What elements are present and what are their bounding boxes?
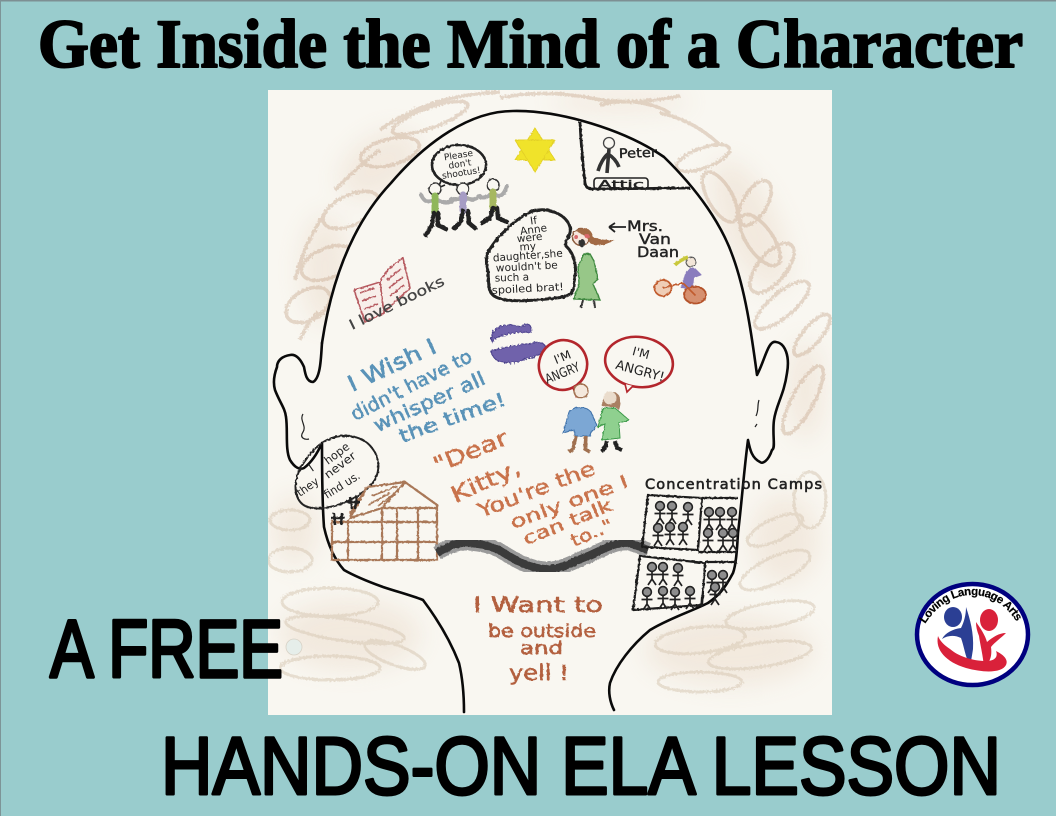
speech bubble: Anne daughter: such a — [495, 271, 529, 285]
speech bubbles: I'm angry: I'M — [631, 344, 651, 362]
label with arrow: Mrs. Van Daan: Mrs. — [627, 219, 663, 235]
text: I want to be outside and yell: and — [520, 638, 563, 659]
text: A FREE: A FREE — [50, 604, 283, 695]
icon: red figure with swoosh — [938, 609, 1007, 671]
brown scribble ovals upper — [280, 92, 836, 439]
speech bubbles: I'm angry: I'M — [552, 348, 573, 367]
speech bubble: Anne daughter: daughter,she — [492, 248, 563, 264]
speech bubble: Anne daughter: were — [516, 231, 543, 245]
speech bubble: I hope they never find us — [294, 436, 378, 508]
text: Dear Kitty: Kitty, — [447, 456, 525, 508]
two children holding hands — [563, 384, 629, 452]
binder hole — [286, 639, 302, 655]
text: I love books: I love books — [347, 274, 447, 334]
Mrs. Van Daan figure — [572, 228, 614, 308]
concentration camps — [633, 477, 822, 610]
text: Dear Kitty — [430, 426, 631, 552]
speech bubbles: I'm angry: ANGRY — [543, 360, 582, 387]
head outline — [322, 111, 788, 710]
text: I wish I didn't have to whisper all the time — [344, 335, 509, 448]
ear details — [302, 400, 759, 439]
speech bubble: please don't shoot us — [432, 145, 486, 188]
speech bubble: Anne daughter: spoiled brat! — [492, 281, 564, 297]
girl on a bicycle — [654, 257, 706, 304]
text: Dear Kitty: to.." — [568, 515, 616, 552]
icon: blue figure — [942, 607, 973, 666]
text: I want to be outside and yell: yell ! — [509, 661, 569, 685]
logo ring text: Loving Language Arts — [918, 588, 1021, 624]
text: I wish I didn't have to whisper all the time: whisper all — [370, 368, 489, 437]
icon: purple lips — [491, 324, 546, 363]
speech bubble: Anne daughter: If — [529, 215, 538, 227]
speech bubble: Anne daughter: wouldn't be — [496, 259, 558, 275]
text: I want to be outside and yell — [473, 593, 603, 685]
speech bubble: I hope they never find us: they — [294, 474, 322, 499]
speech bubbles: I'm angry: ANGRY! — [614, 358, 666, 385]
attic with Peter: Peter — [619, 146, 658, 162]
speech bubble: please don't shoot us: shootus! — [441, 166, 481, 182]
text: Dear Kitty: You're the — [473, 456, 599, 523]
concentration camps: Concentration Camps — [645, 477, 822, 493]
attic with Peter: Attic — [598, 179, 644, 191]
speech bubble: please don't shoot us: Please — [443, 149, 474, 163]
text: I want to be outside and yell: be outside — [488, 621, 596, 642]
pale scribble ovals lower — [268, 472, 826, 692]
speech bubble: Anne daughter: my — [519, 240, 536, 254]
speech bubbles: I'm angry — [532, 333, 676, 397]
icon: yellow star of David — [515, 128, 555, 172]
road to camps — [437, 543, 648, 569]
three stick figures with raised hands — [421, 179, 507, 235]
panel: student drawing on paper — [268, 90, 836, 715]
text: I wish I didn't have to whisper all the time: I Wish I — [344, 335, 441, 397]
speech bubble: I hope they never find us: I — [306, 461, 317, 474]
speech bubble: I hope they never find us: never — [321, 448, 359, 481]
label with arrow: Mrs. Van Daan: Daan — [637, 245, 679, 261]
house (secret annex) — [331, 482, 437, 560]
speech bubble: Anne daughter — [486, 210, 575, 301]
crayon scribble background around the head — [268, 92, 836, 692]
text: I want to be outside and yell: I Want to — [473, 593, 603, 617]
text: Dear Kitty: can talk — [520, 496, 615, 550]
logo: Loving Language Arts — [914, 582, 1030, 688]
text: Dear Kitty: only one I — [508, 472, 631, 534]
attic with Peter — [580, 122, 690, 191]
speech bubble: please don't shoot us: don't — [448, 158, 473, 172]
text: Dear Kitty: "Dear — [430, 426, 513, 479]
icon: open red book — [354, 258, 410, 322]
title: Get Inside the Mind of a Character — [38, 6, 1023, 82]
speech bubble: I hope they never find us: hope — [321, 439, 352, 467]
speech bubble: I hope they never find us: find us. — [321, 468, 363, 502]
speech bubble: Anne daughter: Anne — [519, 222, 548, 238]
text: I wish I didn't have to whisper all the time: didn't have to — [347, 345, 476, 425]
text: I wish I didn't have to whisper all the time: the time! — [396, 389, 509, 448]
label with arrow: Mrs. Van Daan: Van — [639, 232, 671, 248]
label with arrow: Mrs. Van Daan — [609, 219, 679, 261]
